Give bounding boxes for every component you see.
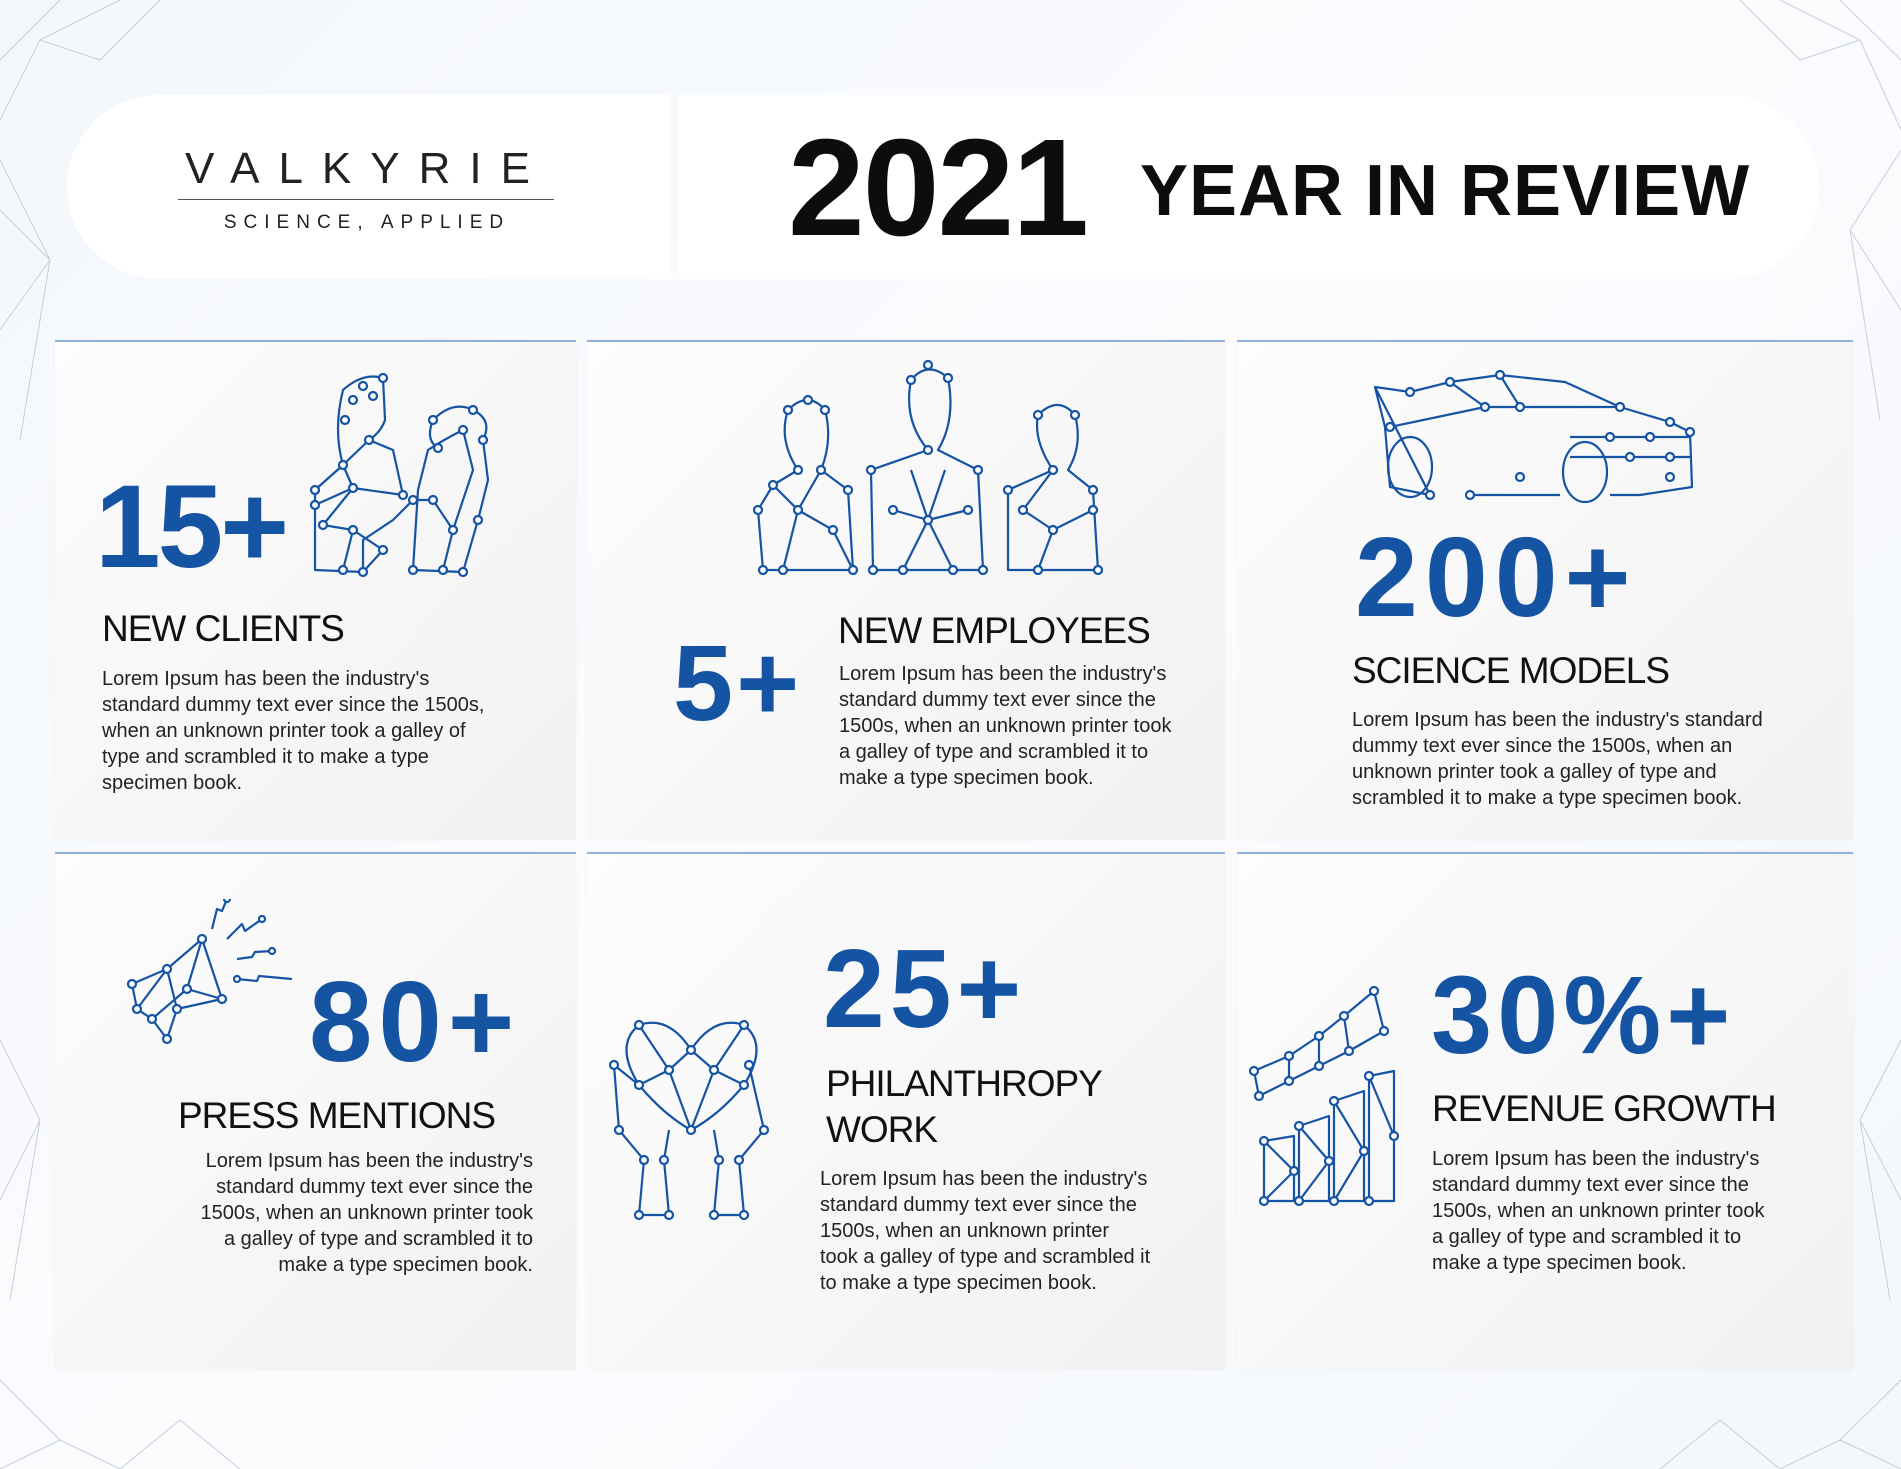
body text [820, 1168, 1150, 1294]
body text: make a type specimen book. [839, 767, 1094, 789]
body text: Lorem Ipsum has been the industry's [206, 1150, 533, 1172]
body text: 1500s, when an unknown printer took [839, 715, 1171, 737]
body text: a galley of type and scrambled it to [1432, 1226, 1741, 1248]
body text: standard dummy text ever since the [820, 1194, 1137, 1216]
body text: scrambled it to make a type specimen book. [1352, 787, 1742, 809]
body text: to make a type specimen book. [820, 1272, 1097, 1294]
icon: growth chart [1249, 986, 1399, 1206]
body text: standard dummy text ever since the [839, 689, 1156, 711]
heading: WORK [826, 1109, 937, 1150]
heading: PHILANTHROPY [826, 1063, 1102, 1104]
logo: VALKYRIE: VALKYRIE [185, 144, 549, 193]
body text: standard dummy text ever since the [1432, 1174, 1749, 1196]
heading: PRESS MENTIONS [178, 1095, 495, 1136]
heading [826, 1063, 1102, 1150]
body text: Lorem Ipsum has been the industry's standard [1352, 709, 1763, 731]
body text: a galley of type and scrambled it to [839, 741, 1148, 763]
panel: philanthropy [587, 852, 1225, 1370]
body text: Lorem Ipsum has been the industry's [102, 668, 429, 690]
heading: REVENUE GROWTH [1432, 1088, 1776, 1129]
panel: press mentions [55, 852, 576, 1370]
heading: SCIENCE MODELS [1352, 650, 1669, 691]
logo: tagline: SCIENCE, APPLIED [224, 212, 510, 233]
header pill: logo [67, 95, 671, 279]
body text: Lorem Ipsum has been the industry's [1432, 1148, 1759, 1170]
panel: science models [1237, 340, 1853, 840]
number 15+: 15+ [95, 461, 286, 593]
number 30%+: 30%+ [1431, 954, 1735, 1077]
body text: Lorem Ipsum has been the industry's [820, 1168, 1147, 1190]
body text: dummy text ever since the 1500s, when an [1352, 735, 1732, 757]
icon: employees [753, 360, 1103, 575]
body text: standard dummy text ever since the [216, 1176, 533, 1198]
body text: specimen book. [102, 772, 242, 794]
body text: 1500s, when an unknown printer took [1432, 1200, 1764, 1222]
number 200+: 200+ [1355, 514, 1638, 640]
body text: standard dummy text ever since the 1500s, [102, 694, 484, 716]
body text [201, 1150, 533, 1276]
title YEAR IN REVIEW: YEAR IN REVIEW [1140, 151, 1750, 231]
number 5+: 5+ [673, 622, 802, 743]
body text [1352, 709, 1763, 809]
body text [839, 663, 1172, 789]
icon: megaphone [127, 899, 292, 1044]
title 2021: 2021 [788, 111, 1087, 265]
header pill: title [679, 95, 1819, 279]
icon: handshake [310, 372, 490, 578]
panel: new clients [55, 340, 576, 840]
body text [1432, 1148, 1764, 1274]
body text: type and scrambled it to make a type [102, 746, 429, 768]
body text: a galley of type and scrambled it to [224, 1228, 533, 1250]
panel: new employees [587, 340, 1225, 840]
body text: when an unknown printer took a galley of [102, 720, 466, 742]
body text: make a type specimen book. [1432, 1252, 1687, 1274]
icon: car [1374, 370, 1696, 504]
body text: make a type specimen book. [278, 1254, 533, 1276]
body text: Lorem Ipsum has been the industry's [839, 663, 1166, 685]
body text: 1500s, when an unknown printer took [201, 1202, 533, 1224]
body text [102, 668, 484, 794]
heading: NEW EMPLOYEES [838, 610, 1150, 651]
number 80+: 80+ [309, 959, 520, 1086]
number 25+: 25+ [823, 927, 1026, 1051]
body text: unknown printer took a galley of type and [1352, 761, 1717, 783]
panel: revenue growth [1237, 852, 1853, 1370]
icon: heart in hands [609, 1020, 770, 1220]
header [67, 95, 1750, 279]
heading: NEW CLIENTS [102, 608, 344, 649]
body text: 1500s, when an unknown printer [820, 1220, 1109, 1242]
body text: took a galley of type and scrambled it [820, 1246, 1150, 1268]
